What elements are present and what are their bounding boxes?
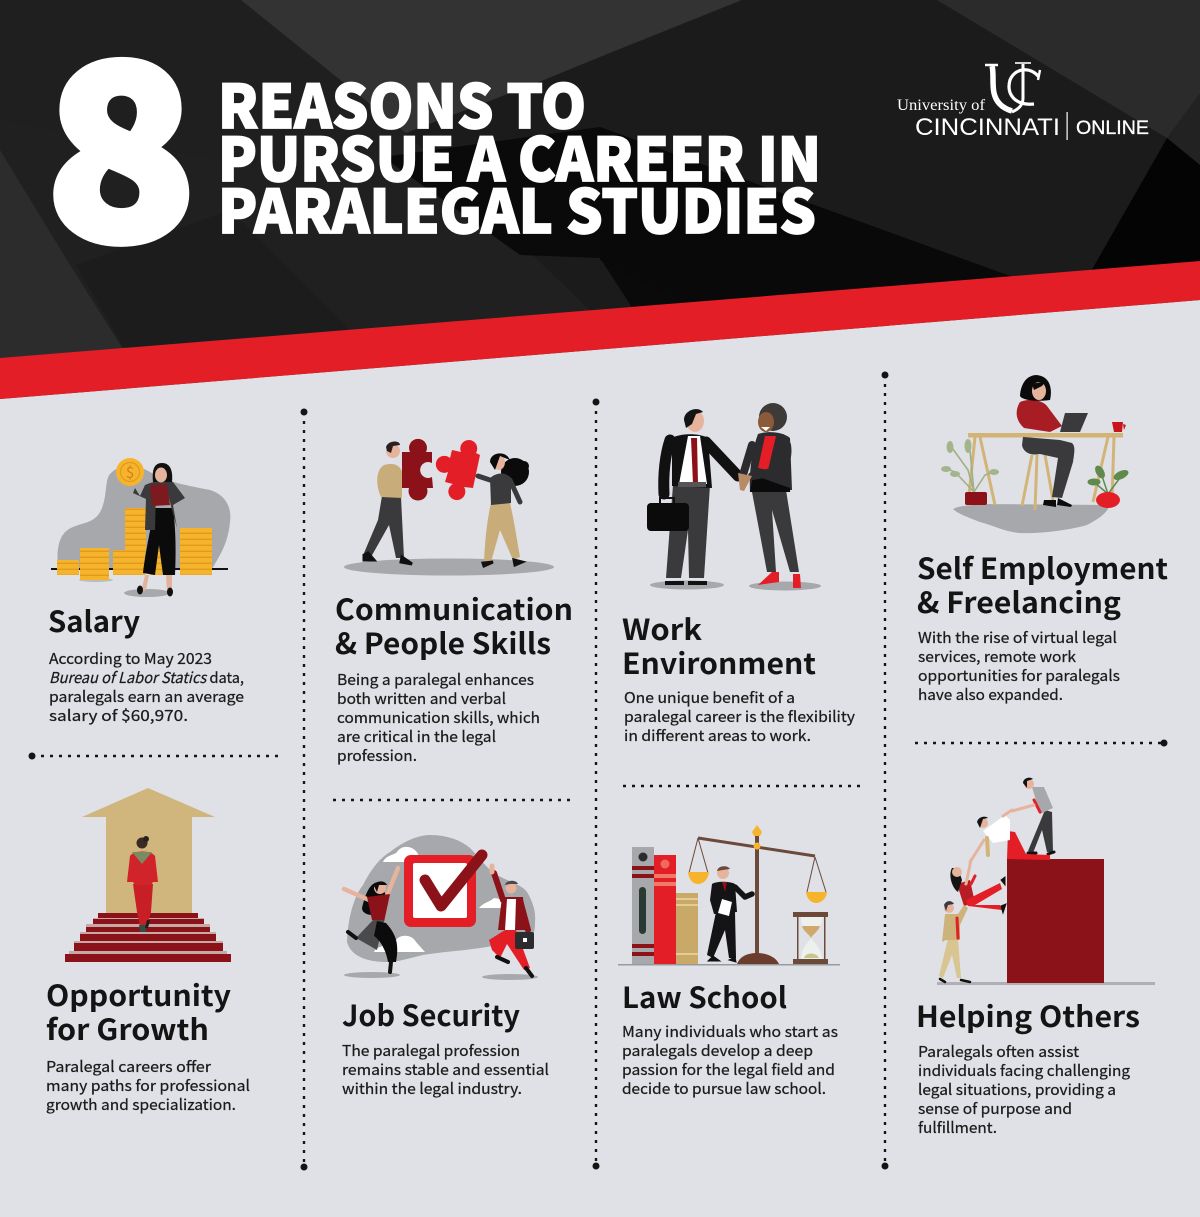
heading: Law School: Law School [622,975,787,1017]
figure: businesswoman [738,403,801,588]
heading: Helping Others: Helping Others [916,994,1140,1036]
illustration: stairs toward up arrow [65,788,231,962]
icon: balance scale [688,825,827,964]
heading: Opportunity for Growth: Opportunity [46,973,231,1015]
text: law school description: paralegals develop a deep [622,1040,813,1061]
text: communication description: Being a paralegal enhances [337,669,534,690]
text: communication description: communication skills, which [337,707,540,728]
heading: Self Employment & Freelancing: Self Employment [917,546,1168,588]
text: salary description: paralegals earn an average [49,686,244,707]
panel: work environment [622,403,855,746]
title: PARALEGAL STUDIES [218,164,816,251]
icon: briefcase [647,498,689,531]
text: self employment description: With the rise of virtual legal [918,627,1117,648]
icon: desk [968,433,1123,505]
figure: jumping man with briefcase [489,866,534,976]
heading: Work Environment: Work [622,607,703,649]
figure: second climber in red trousers [970,810,1050,862]
text: law school description: decide to pursue law school. [622,1078,826,1099]
logo: University of Cincinnati Online: CINCINNATI [915,114,1060,141]
icon: dark red puzzle piece [402,439,433,501]
figure: jumping woman [344,868,398,972]
logo: University of Cincinnati Online [897,63,1149,141]
text: self employment description [918,627,1120,705]
logo: University of Cincinnati Online: ONLINE [1076,117,1149,139]
text: law school description: Many individuals who start as [622,1021,838,1042]
illustration: two people shaking hands [647,403,821,590]
panel: job security [342,835,549,1099]
icon: dollar coin: $ [126,462,134,483]
illustration: people celebrating a checkmark [344,835,538,980]
illustration: books, scales and lawyer [618,825,840,966]
light area under the red band [0,300,1200,402]
heading: Work Environment: Environment [622,641,816,683]
heading: Opportunity for Growth: for Growth [46,1007,209,1049]
text: communication description [337,669,540,766]
icon: red puzzle piece [436,440,480,500]
text: growth description: Paralegal careers offer [46,1056,211,1077]
heading: Self Employment & Freelancing: & Freelancing [917,580,1121,622]
text: helping others description: legal situations, providing a [918,1079,1116,1100]
heading: Opportunity for Growth [46,973,231,1049]
text: salary description: According to May 2023 [49,648,212,669]
figure: top man [1012,778,1054,854]
text: work environment description: One unique benefit of a [624,687,795,708]
heading: Job Security: Job Security [342,993,520,1035]
panel: communication and people skills [335,439,573,766]
text: job security description [342,1040,549,1099]
icon: checkbox [404,855,482,927]
dotted dividers [28,372,1168,1170]
icon: plant in red pot [1088,464,1130,508]
text: helping others description [918,1041,1131,1138]
text: work environment description [624,687,855,746]
text: growth description: growth and specialization. [46,1094,236,1115]
text: growth description [46,1056,250,1115]
icon: dollar coin [116,458,144,486]
panel: opportunity for growth [46,788,250,1115]
text: job security description: within the legal industry. [342,1078,522,1099]
illustration: woman with coin stacks [51,458,230,597]
text: salary description: salary of $60,970. [49,705,188,726]
block [1007,859,1104,983]
figure: businessman with briefcase [647,409,738,585]
illustration: two people joining puzzle pieces [344,439,554,576]
text: growth description: many paths for professional [46,1075,250,1096]
illustration: woman working at desk [941,375,1130,533]
red diagonal band [0,261,1200,399]
figure: woman with laptop [1017,375,1074,507]
text: self employment description: opportunities for paralegals [918,665,1120,686]
title: REASONS TO [218,59,586,146]
illustration: people helping each other climb [937,778,1155,985]
text: work environment description: paralegal career is the flexibility [624,706,855,727]
icon: red mug [1112,422,1126,432]
text: job security description: The paralegal profession [342,1040,520,1061]
text: helping others description: fulfillment. [918,1117,997,1138]
text: helping others description: individuals facing challenging [918,1060,1131,1081]
figure: man [364,441,412,564]
title: PURSUE A CAREER IN [218,112,821,199]
panel: helping others [916,778,1155,1138]
text: helping others description: sense of purpose and [918,1098,1072,1119]
icon: laptop [1060,413,1088,432]
figure: woman [478,453,529,566]
panel: salary [48,458,244,726]
figure: bottom man lifting [939,901,970,982]
icon: hourglass [793,912,828,964]
text: job security description: remains stable and essential [342,1059,549,1080]
text: communication description: are critical in the legal [337,726,496,747]
logo: University of Cincinnati Online: University of [897,97,986,114]
text: work environment description: in different areas to work. [624,725,811,746]
heading: Communication & People Skills [335,587,573,663]
icon: clouds [374,847,508,952]
heading: Salary: Salary [48,599,140,641]
icon: UC monogram [985,63,1040,112]
figure: lawyer with document [707,866,752,962]
figure: third climber woman in red [950,860,1006,913]
figure: person in red suit walking [127,836,158,932]
text: helping others description: Paralegals often assist [918,1041,1079,1062]
text: salary description: Bureau of Labor Statics data, [49,667,244,688]
icon: stack of books [632,847,698,964]
text: self employment description: services, remote work [918,646,1077,667]
heading: Communication & People Skills: Communication [335,587,573,629]
heading: Communication & People Skills: & People Skills [335,621,551,663]
text: communication description: profession. [337,745,417,766]
text: self employment description: have also expanded. [918,684,1063,705]
panel: self employment and freelancing [917,375,1168,705]
title [218,59,821,251]
text: law school description: passion for the legal field and [622,1059,835,1080]
panel: law school [618,825,840,1099]
text: salary description [49,648,244,726]
heading: Work Environment [622,607,816,683]
icon: plant in dark red pot [941,439,999,505]
text: communication description: both written and verbal [337,688,506,709]
heading: Self Employment & Freelancing [917,546,1168,622]
text: law school description [622,1021,838,1099]
header: dark faceted background [0,0,1200,400]
